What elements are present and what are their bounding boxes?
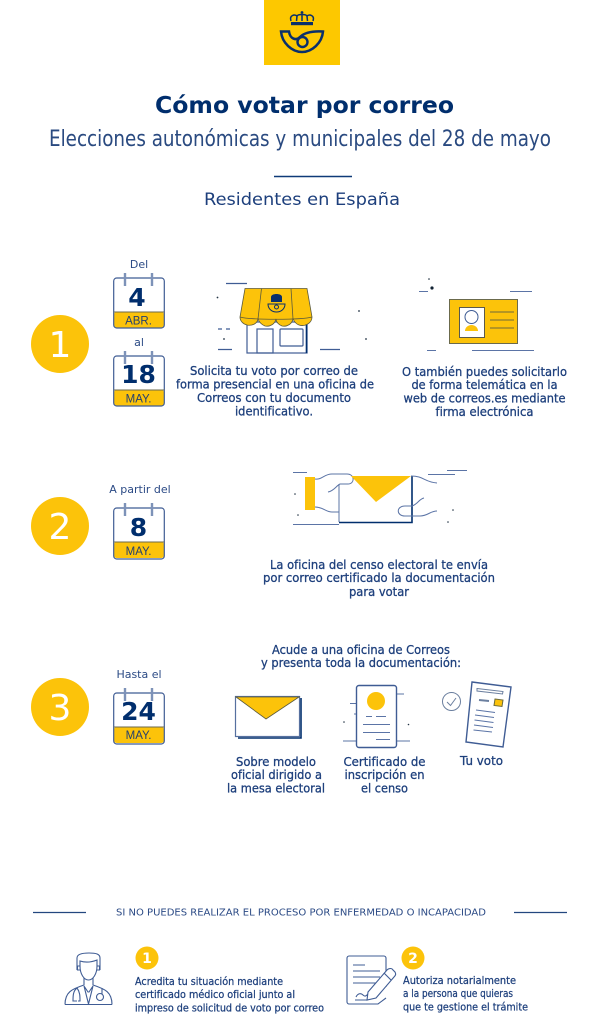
badge 2: 2	[408, 951, 418, 967]
text: telemática: firma electrónica	[436, 404, 534, 419]
text: presencial	[176, 363, 374, 418]
number badge 1	[31, 315, 89, 373]
calendar: 4 abril: 4	[128, 283, 146, 312]
text: autoriza: Autoriza notarialmente	[403, 975, 516, 987]
text: telemática	[402, 364, 567, 419]
text: presencial: identificativo.	[235, 404, 313, 418]
footer heading: SI NO PUEDES REALIZAR EL PROCESO POR ENFERMEDAD O INCAPACIDAD	[116, 908, 486, 918]
calendar: 4 abril	[114, 273, 164, 328]
badge 1: 1	[142, 951, 152, 967]
text: acude a una oficina: Acude a una oficina de Correos	[272, 642, 450, 657]
text: acude a una oficina	[261, 642, 461, 670]
title: Cómo votar por correo	[155, 93, 454, 119]
text: telemática: O también puedes solicitarlo	[402, 364, 567, 379]
text: autoriza: que te gestione el trámite	[403, 1002, 528, 1014]
label: certificado: inscripción en	[344, 767, 424, 782]
icon: signing document	[347, 956, 396, 1004]
number badge 3	[31, 678, 89, 736]
calendar: 8 mayo: MAY.	[126, 546, 151, 558]
text: acredita: impreso de solicitud de voto por correo	[135, 1002, 324, 1014]
icon: certificate	[343, 686, 410, 748]
calendar: 18 mayo	[114, 351, 164, 406]
icon: doctor	[65, 953, 112, 1004]
step 3	[31, 642, 511, 796]
text: acredita: certificado médico oficial junto al	[135, 989, 295, 1001]
calendar: 4 abril: ABR.	[125, 316, 152, 328]
text: acredita: Acredita tu situación mediante	[135, 976, 283, 988]
number badge 2	[31, 497, 89, 555]
text: documentación: por correo certificado la documentación	[263, 570, 495, 585]
text: documentación: La oficina del censo electoral te envía	[270, 557, 488, 572]
icon: hands passing envelope	[293, 470, 467, 524]
date label: al: al	[134, 336, 144, 349]
calendar: 8 mayo: 8	[130, 513, 147, 542]
badge 1	[136, 946, 158, 970]
footer option 2	[347, 946, 528, 1014]
date label: Hasta el: Hasta el	[116, 668, 162, 681]
label: tu voto: Tu voto	[459, 753, 503, 768]
calendar: 24 mayo: 24	[121, 697, 156, 726]
text: autoriza	[403, 975, 528, 1014]
text: autoriza: a la persona que quieras	[403, 988, 513, 1000]
calendar: 24 mayo: MAY.	[126, 730, 151, 742]
footer option 1	[65, 946, 324, 1014]
text: acude a una oficina: y presenta toda la documentación:	[261, 655, 461, 670]
label: sobre modelo	[227, 754, 325, 796]
text: acredita	[135, 976, 324, 1014]
text: telemática: de forma telemática en la	[412, 377, 558, 392]
calendar: 18 mayo: 18	[121, 360, 156, 389]
text: presencial: Solicita tu voto por correo de	[190, 363, 358, 378]
icon: ID card	[419, 278, 534, 350]
calendar: 18 mayo: MAY.	[126, 394, 151, 406]
icon: post office shop	[217, 284, 367, 353]
date label: Del: Del	[130, 258, 148, 271]
number badge 1: 1	[49, 325, 71, 366]
label: sobre modelo: la mesa electoral	[227, 780, 325, 796]
number badge 2: 2	[49, 507, 71, 548]
icon: check and ballot	[442, 682, 511, 747]
number badge 3: 3	[49, 688, 71, 729]
text: documentación: para votar	[349, 584, 410, 599]
step 2	[31, 470, 495, 599]
label: certificado	[344, 754, 426, 796]
label: certificado: Certificado de	[344, 754, 426, 769]
step 1	[31, 258, 567, 419]
date label: A partir del: A partir del	[109, 483, 171, 496]
label: sobre modelo: Sobre modelo	[236, 754, 316, 769]
text: telemática: web de correos.es mediante	[404, 390, 566, 406]
text: presencial: forma presencial en una oficina de	[176, 376, 374, 392]
badge 2	[402, 946, 424, 970]
label: sobre modelo: oficial dirigido a	[231, 767, 322, 782]
calendar: 8 mayo	[114, 503, 164, 559]
text: presencial: Correos con tu documento	[197, 390, 351, 405]
label: certificado: el censo	[361, 780, 408, 796]
section heading: residentes: Residentes en España	[204, 190, 400, 210]
calendar: 24 mayo	[114, 688, 164, 744]
logo: Correos	[264, 0, 340, 65]
icon: envelope	[236, 696, 301, 738]
text: documentación	[263, 557, 495, 599]
